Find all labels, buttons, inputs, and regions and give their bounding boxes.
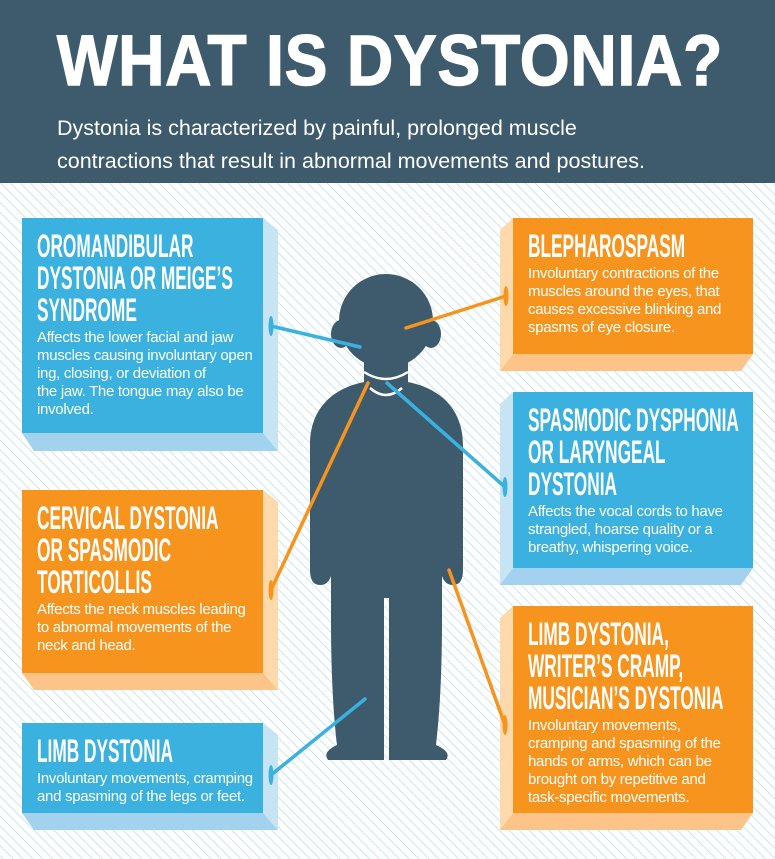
text: Involuntary contractions of the: [528, 265, 719, 282]
text: breathy, whispering voice.: [528, 539, 693, 556]
heading: [37, 500, 218, 600]
heading: MUSICIAN’S DYSTONIA: [528, 680, 724, 716]
text: [37, 601, 246, 654]
heading: [37, 228, 233, 328]
text: the jaw. The tongue may also be: [37, 383, 243, 400]
subtitle: Dystonia is characterized by painful, prolonged muscle: [57, 116, 577, 140]
heading: DYSTONIA OR MEIGE’S: [37, 260, 233, 296]
text: [37, 329, 253, 418]
text: involved.: [37, 401, 94, 418]
text: [528, 503, 723, 556]
text: Involuntary movements, cramping: [37, 770, 253, 787]
box: blepharospasm: [500, 218, 753, 371]
heading: OR LARYNGEAL: [528, 434, 666, 470]
text: spasms of eye closure.: [528, 319, 675, 336]
heading: SYNDROME: [37, 292, 137, 328]
text: brought on by repetitive and: [528, 771, 706, 788]
text: Affects the lower facial and jaw: [37, 329, 233, 346]
heading: SPASMODIC DYSPHONIA: [528, 402, 739, 438]
title: WHAT IS DYSTONIA?: [57, 22, 723, 101]
subtitle: [57, 116, 645, 173]
text: muscles around the eyes, that: [528, 283, 719, 300]
text: strangled, hoarse quality or a: [528, 521, 712, 538]
subtitle: contractions that result in abnormal movements and postures.: [57, 149, 645, 173]
text: cramping and spasming of the: [528, 735, 721, 752]
heading: [528, 402, 739, 502]
text: ing, closing, or deviation of: [37, 365, 206, 382]
heading: WRITER’S CRAMP,: [528, 648, 683, 684]
text: Affects the neck muscles leading: [37, 601, 246, 618]
heading: LIMB DYSTONIA: [37, 733, 173, 769]
text: Affects the vocal cords to have: [528, 503, 723, 520]
heading: TORTICOLLIS: [37, 564, 152, 600]
text: [37, 770, 253, 805]
text: neck and head.: [37, 637, 135, 654]
text: Involuntary movements,: [528, 717, 681, 734]
box: cervical: [22, 490, 278, 690]
box: limb dystonia right: [500, 606, 753, 830]
text: [528, 265, 721, 336]
heading: CERVICAL DYSTONIA: [37, 500, 218, 536]
text: muscles causing involuntary open: [37, 347, 253, 364]
heading: [528, 616, 724, 716]
heading: OR SPASMODIC: [37, 532, 171, 568]
heading: DYSTONIA: [528, 466, 617, 502]
text: hands or arms, which can be: [528, 753, 712, 770]
text: task-specific movements.: [528, 789, 689, 806]
text: to abnormal movements of the: [37, 619, 231, 636]
heading: LIMB DYSTONIA,: [528, 616, 669, 652]
text: [528, 717, 721, 806]
box: spasmodic dysphonia: [500, 392, 753, 585]
heading: OROMANDIBULAR: [37, 228, 193, 264]
header: [0, 0, 775, 183]
text: and spasming of the legs or feet.: [37, 788, 245, 805]
heading: BLEPHAROSPASM: [528, 228, 685, 264]
text: causes excessive blinking and: [528, 301, 721, 318]
box: limb dystonia left: [22, 723, 278, 830]
background stripes: [0, 183, 775, 859]
box: oromandibular: [22, 218, 278, 451]
